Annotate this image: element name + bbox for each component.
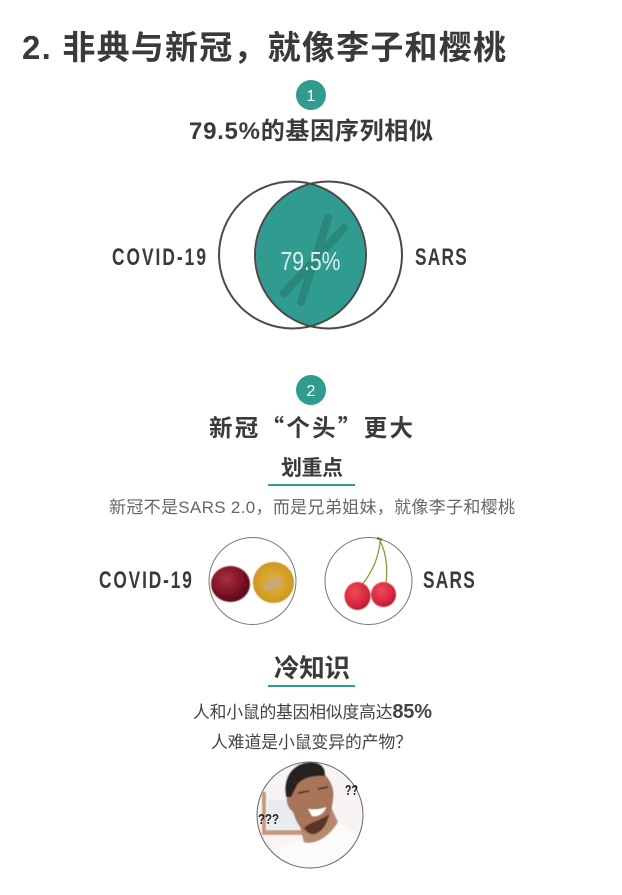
label: SARS: SARS bbox=[423, 567, 475, 594]
subheading: key point: 划重点 bbox=[281, 457, 343, 480]
badge: number 1 bbox=[296, 80, 326, 110]
right circle bbox=[255, 182, 402, 328]
subheading: key point bbox=[268, 457, 355, 486]
question marks right: ?? bbox=[345, 782, 358, 799]
text: key point description: 新冠不是SARS 2.0，而是兄弟姐妹，就像李子和樱桃 bbox=[109, 498, 515, 517]
label: COVID-19: COVID-19 bbox=[112, 244, 206, 271]
icon: cherries bbox=[325, 538, 412, 624]
text: fun fact line 2: 人难道是小鼠变异的产物？ bbox=[211, 733, 412, 752]
venn overlap bbox=[256, 184, 365, 326]
badge: number 2: 2 bbox=[307, 383, 316, 400]
badge: number 1: 1 bbox=[307, 88, 316, 105]
subheading: fun fact: 冷知识 bbox=[274, 655, 350, 683]
heading: 79.5% similar gene sequence: 79.5%的基因序列相似 bbox=[189, 118, 433, 145]
text: fun fact line 1: 人和小鼠的基因相似度高达85% bbox=[193, 701, 432, 723]
icon: confused man portrait bbox=[255, 762, 368, 872]
question marks left: ??? bbox=[258, 811, 279, 828]
icon: plums bbox=[209, 538, 296, 624]
label: SARS: SARS bbox=[415, 244, 467, 271]
badge: number 2 bbox=[296, 375, 326, 405]
heading: new coronavirus is bigger: 新冠“个头”更大 bbox=[209, 409, 413, 443]
venn diagram bbox=[219, 182, 402, 328]
icon: chromosome bbox=[284, 218, 344, 302]
label: COVID-19: COVID-19 bbox=[99, 567, 192, 594]
overlap value: 79.5% bbox=[280, 246, 340, 276]
left circle bbox=[219, 182, 366, 328]
title: 2. 非典与新冠，就像李子和樱桃 bbox=[22, 29, 506, 66]
